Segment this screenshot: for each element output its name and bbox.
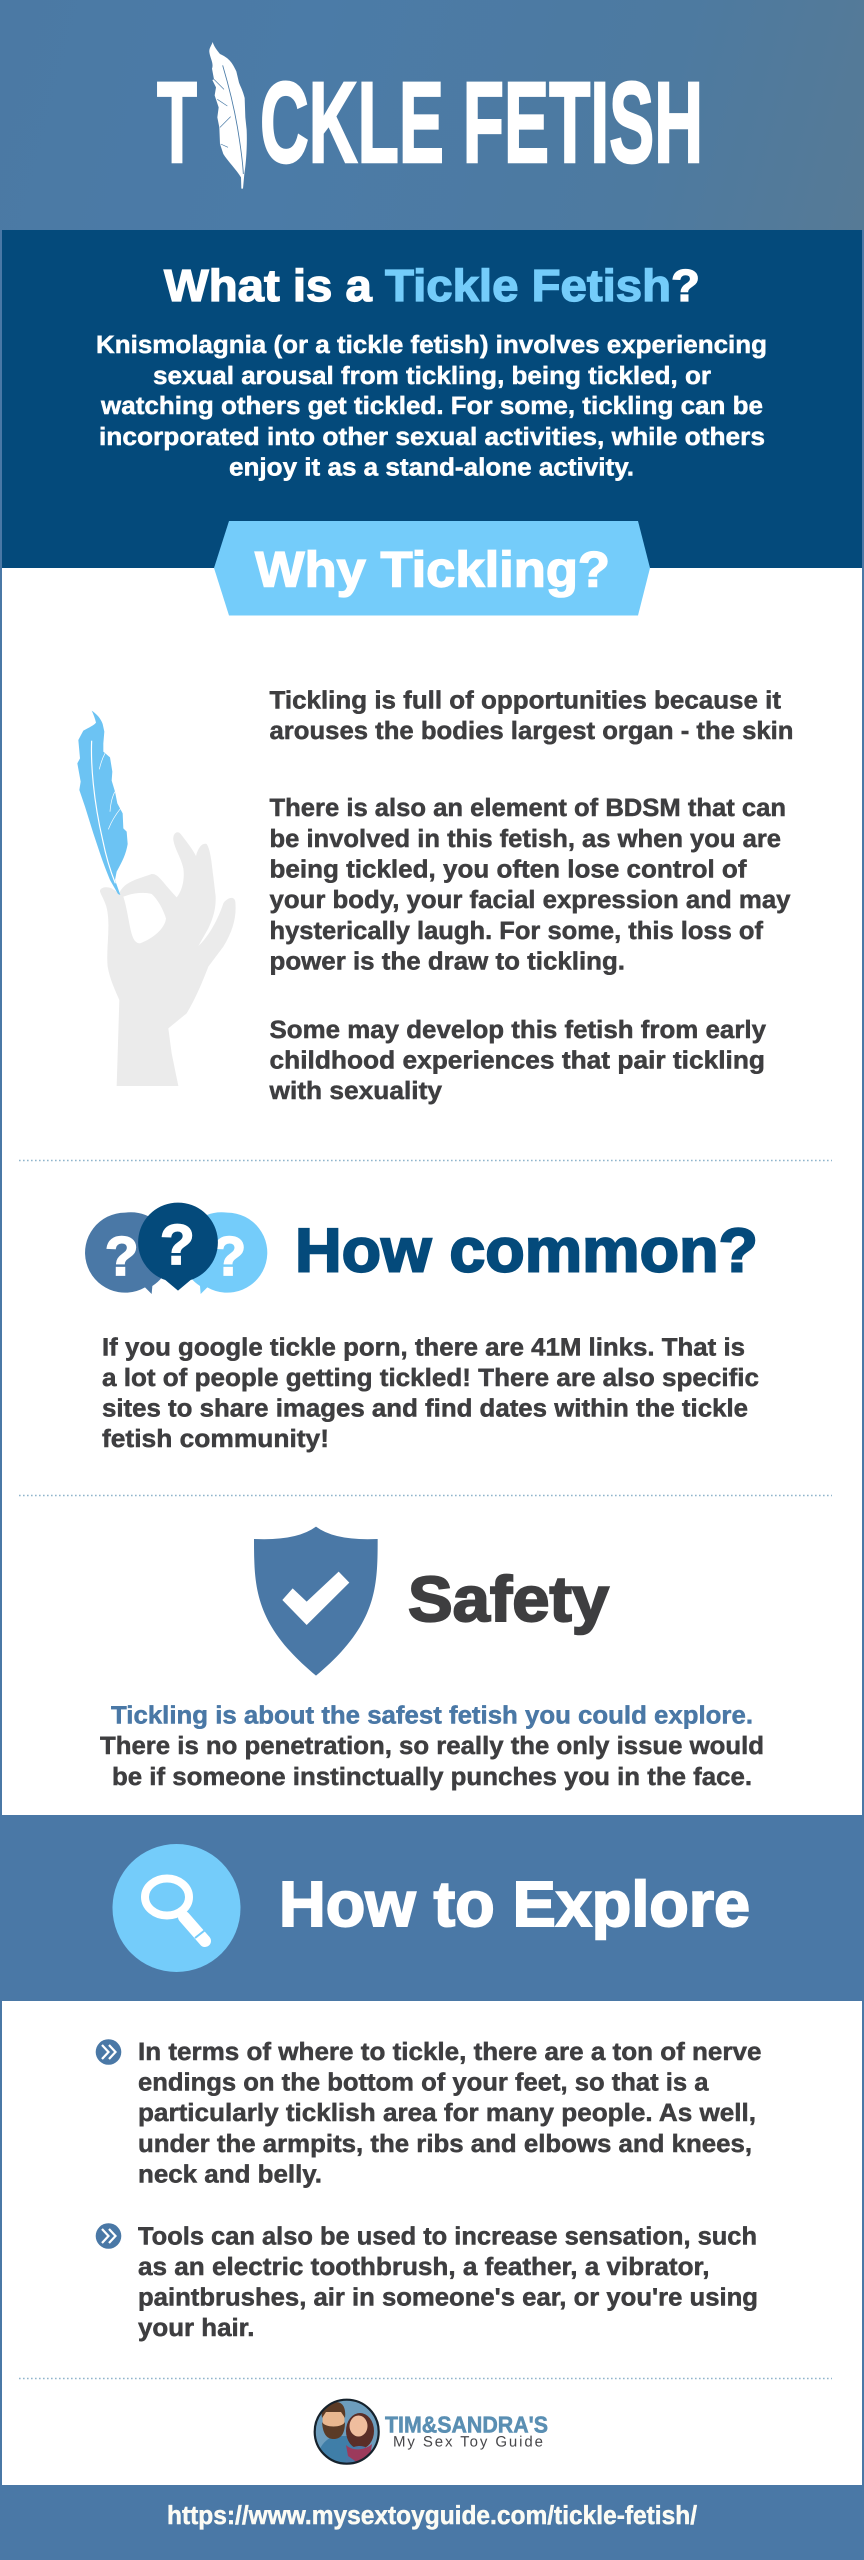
text block: tools bbox=[138, 2222, 758, 2342]
text block: why tickling paragraphs: childhood experiences that pair tickling bbox=[270, 1046, 765, 1074]
text block: tools: paintbrushes, air in someone's ear, or you're using bbox=[138, 2284, 758, 2312]
text block: safety bbox=[100, 1702, 764, 1791]
text block: where to tickle: particularly ticklish area for many people. As well, bbox=[138, 2099, 756, 2127]
logo text bbox=[385, 2412, 548, 2450]
text block: why tickling paragraphs: your body, your facial expression and may bbox=[270, 886, 791, 914]
icon: hand holding feather bbox=[77, 711, 236, 1086]
heading: how to explore: How to Explore bbox=[279, 1868, 750, 1940]
text block: how common bbox=[102, 1334, 759, 1453]
text block: why tickling paragraphs: being tickled, you often lose control of bbox=[270, 856, 747, 884]
list item: tools bbox=[96, 2222, 758, 2342]
text block: tools: Tools can also be used to increase sensation, such bbox=[138, 2222, 757, 2250]
icon: shield with check bbox=[254, 1527, 378, 1676]
icon: left bubble: ? bbox=[105, 1225, 138, 1287]
text block: how common: fetish community! bbox=[102, 1425, 329, 1453]
text block: how common: a lot of people getting tickled! There are also specific bbox=[102, 1364, 759, 1392]
title bbox=[157, 59, 703, 187]
icon: question mark bubbles bbox=[85, 1203, 267, 1294]
divider bbox=[19, 1494, 832, 1496]
text block: safety: Tickling is about the safest fetish you could explore. bbox=[111, 1702, 753, 1730]
text block: definition: incorporated into other sexual activities, while others bbox=[99, 423, 765, 451]
text block: where to tickle: In terms of where to tickle, there are a ton of nerve bbox=[138, 2038, 762, 2066]
icon: left bubble bbox=[85, 1212, 171, 1294]
text block: why tickling paragraphs: Some may develop this fetish from early bbox=[270, 1016, 766, 1044]
text block: why tickling paragraphs: Tickling is full of opportunities because it bbox=[270, 686, 782, 714]
text block: where to tickle: endings on the bottom of your feet, so that is a bbox=[138, 2068, 710, 2096]
icon: hand bbox=[100, 832, 236, 1086]
icon: chevron bullet bbox=[96, 2223, 121, 2249]
icon: magnifying glass bbox=[112, 1844, 240, 1972]
text block: how common: If you google tickle porn, there are 41M links. That is bbox=[102, 1334, 745, 1362]
header banner bbox=[0, 0, 864, 230]
icon: couple portrait bbox=[315, 2400, 379, 2470]
heading: why tickling banner: Why Tickling? bbox=[255, 542, 610, 598]
divider bbox=[19, 2378, 832, 2380]
text block: definition: sexual arousal from tickling, being tickled, or bbox=[153, 362, 711, 390]
text block: where to tickle: under the armpits, the ribs and elbows and knees, bbox=[138, 2130, 752, 2158]
footer banner bbox=[0, 2485, 864, 2560]
text block: definition: watching others get tickled. For some, tickling can be bbox=[100, 392, 763, 420]
text block: where to tickle bbox=[138, 2038, 762, 2188]
text block: why tickling paragraphs: with sexuality bbox=[268, 1077, 442, 1105]
text block: why tickling paragraphs: hysterically laugh. For some, this loss of bbox=[270, 917, 764, 945]
text block: why tickling paragraphs: power is the draw to tickling. bbox=[270, 948, 625, 976]
icon: centre bubble: ? bbox=[160, 1213, 195, 1276]
text block: why tickling paragraphs: arouses the bodies largest organ - the skin bbox=[270, 717, 794, 745]
icon: right bubble: ? bbox=[213, 1225, 246, 1287]
logo text: TIM&SANDRA'S bbox=[385, 2412, 548, 2438]
panel: what is a tickle fetish bbox=[2, 230, 862, 568]
title: T bbox=[157, 59, 197, 187]
footer url: https://www.mysextoyguide.com/tickle-fetish/ bbox=[167, 2500, 697, 2530]
icon: blue feather bbox=[77, 711, 128, 895]
text block: definition bbox=[96, 331, 767, 482]
text block: definition: enjoy it as a stand-alone activity. bbox=[229, 454, 634, 482]
divider bbox=[19, 1160, 832, 1162]
text block: definition: Knismolagnia (or a tickle fetish) involves experiencing bbox=[96, 331, 767, 359]
logo: tim and sandra's bbox=[315, 2400, 548, 2470]
icon: chevron bullet bbox=[96, 2039, 121, 2065]
list item: where to tickle bbox=[96, 2038, 762, 2188]
text block: how common: sites to share images and find dates within the tickle bbox=[102, 1394, 748, 1422]
heading: what is a tickle fetish: What is a Tickle Fetish ? bbox=[164, 260, 700, 311]
text block: why tickling paragraphs: There is also an element of BDSM that can bbox=[270, 794, 786, 822]
icon: white feather as letter I bbox=[209, 42, 247, 189]
text block: where to tickle: neck and belly. bbox=[138, 2160, 322, 2188]
text block: safety: be if someone instinctually punches you in the face. bbox=[112, 1763, 752, 1791]
text block: tools: your hair. bbox=[138, 2314, 254, 2342]
icon: right bubble bbox=[181, 1212, 267, 1294]
logo text: My Sex Toy Guide bbox=[393, 2434, 543, 2450]
text block: why tickling paragraphs: be involved in this fetish, as when you are bbox=[270, 825, 781, 853]
text block: why tickling paragraphs bbox=[268, 686, 794, 1105]
heading: safety: Safety bbox=[408, 1563, 609, 1635]
icon: centre bubble bbox=[138, 1203, 218, 1291]
text block: safety: There is no penetration, so really the only issue would bbox=[100, 1732, 764, 1760]
heading: how common: How common? bbox=[295, 1216, 758, 1286]
panel: how to explore banner bbox=[0, 1815, 864, 2001]
heading: why tickling banner bbox=[214, 521, 650, 616]
text block: tools: as an electric toothbrush, a feather, a vibrator, bbox=[138, 2253, 710, 2281]
